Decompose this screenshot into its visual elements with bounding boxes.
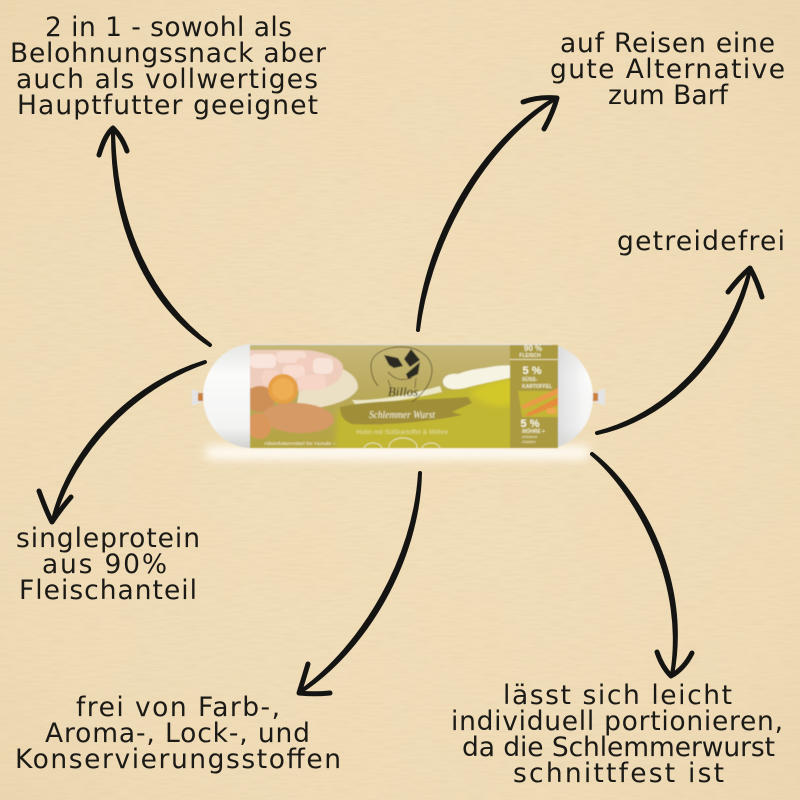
percentage panel: KARTOFFEL [522,384,552,390]
glow beneath product [205,446,590,459]
wrapper shading right [558,346,592,447]
sweet potatoes [250,374,334,440]
arrow: to single protein text [39,362,205,522]
text: single protein: singleprotein [16,523,200,554]
badge icons [363,436,441,448]
arrow: to grain-free text [597,268,762,433]
percentage panel: FLEISCH [519,353,541,359]
text: free from additives: Konservierungsstoffen [15,744,341,775]
text: free from additives [15,692,341,775]
feed description: Alleinfuttermittel für Hunde – [264,441,337,446]
text: portioning [451,680,783,789]
printed label [243,344,560,456]
yellow splash [334,378,510,448]
flavour text: Huhn mit Süßkartoffel & Möhre [356,429,448,436]
logo [371,347,432,402]
white wrapper [203,344,593,448]
white cloud [443,365,518,389]
arrow: to top-right text [418,98,557,330]
logo: Billos [388,384,418,399]
arrow: to top-left text [99,128,210,345]
text: single protein [16,523,200,606]
text: 2 in 1: Belohnungssnack aber [10,38,326,69]
percentage panel [510,344,558,448]
percentage panel: erlesene [522,434,538,439]
brush stroke [340,397,472,425]
text: travel alternative: auf Reisen eine [560,28,775,59]
text: 2 in 1: 2 in 1 - sowohl als [45,12,292,43]
arrow: to portioning text [592,454,692,676]
text: single protein: aus 90% [42,549,167,580]
product name: Schlemmer Wurst [369,410,436,421]
text: 2 in 1: auch als vollwertiges [16,64,318,95]
text: 2 in 1: Hauptfutter geeignet [17,90,318,121]
right end clip [592,388,605,406]
left end clip [192,389,204,406]
text: single protein: Fleischanteil [19,575,197,606]
percentage panel: MÖHRE + [522,428,545,435]
text: free from additives: frei von Farb-, [76,692,280,723]
text: portioning: lässt sich leicht [503,680,732,711]
percentage panel: 5 % [521,418,540,430]
text: portioning: individuell portionieren, [451,706,783,737]
text: free from additives: Aroma-, Lock-, und [45,718,310,749]
product: sausage package [192,344,605,459]
carrots [521,388,558,416]
text: grain free: getreidefrei [617,226,785,257]
percentage panel: 90 % [524,344,542,353]
arrow: to additive-free text [299,473,420,694]
text: portioning: schnittfest ist [513,758,724,789]
text: 2 in 1 [10,12,326,121]
text: portioning: da die Schlemmerwurst [462,732,775,763]
text: travel alternative: gute Alternative [550,54,785,85]
text: travel alternative [550,28,785,111]
percentage panel: SÜSS- [522,376,538,383]
percentage panel: 5 % [523,365,542,377]
chicken on plate [250,350,358,410]
percentage panel: Zutaten [521,439,536,444]
text: travel alternative: zum Barf [608,80,729,111]
